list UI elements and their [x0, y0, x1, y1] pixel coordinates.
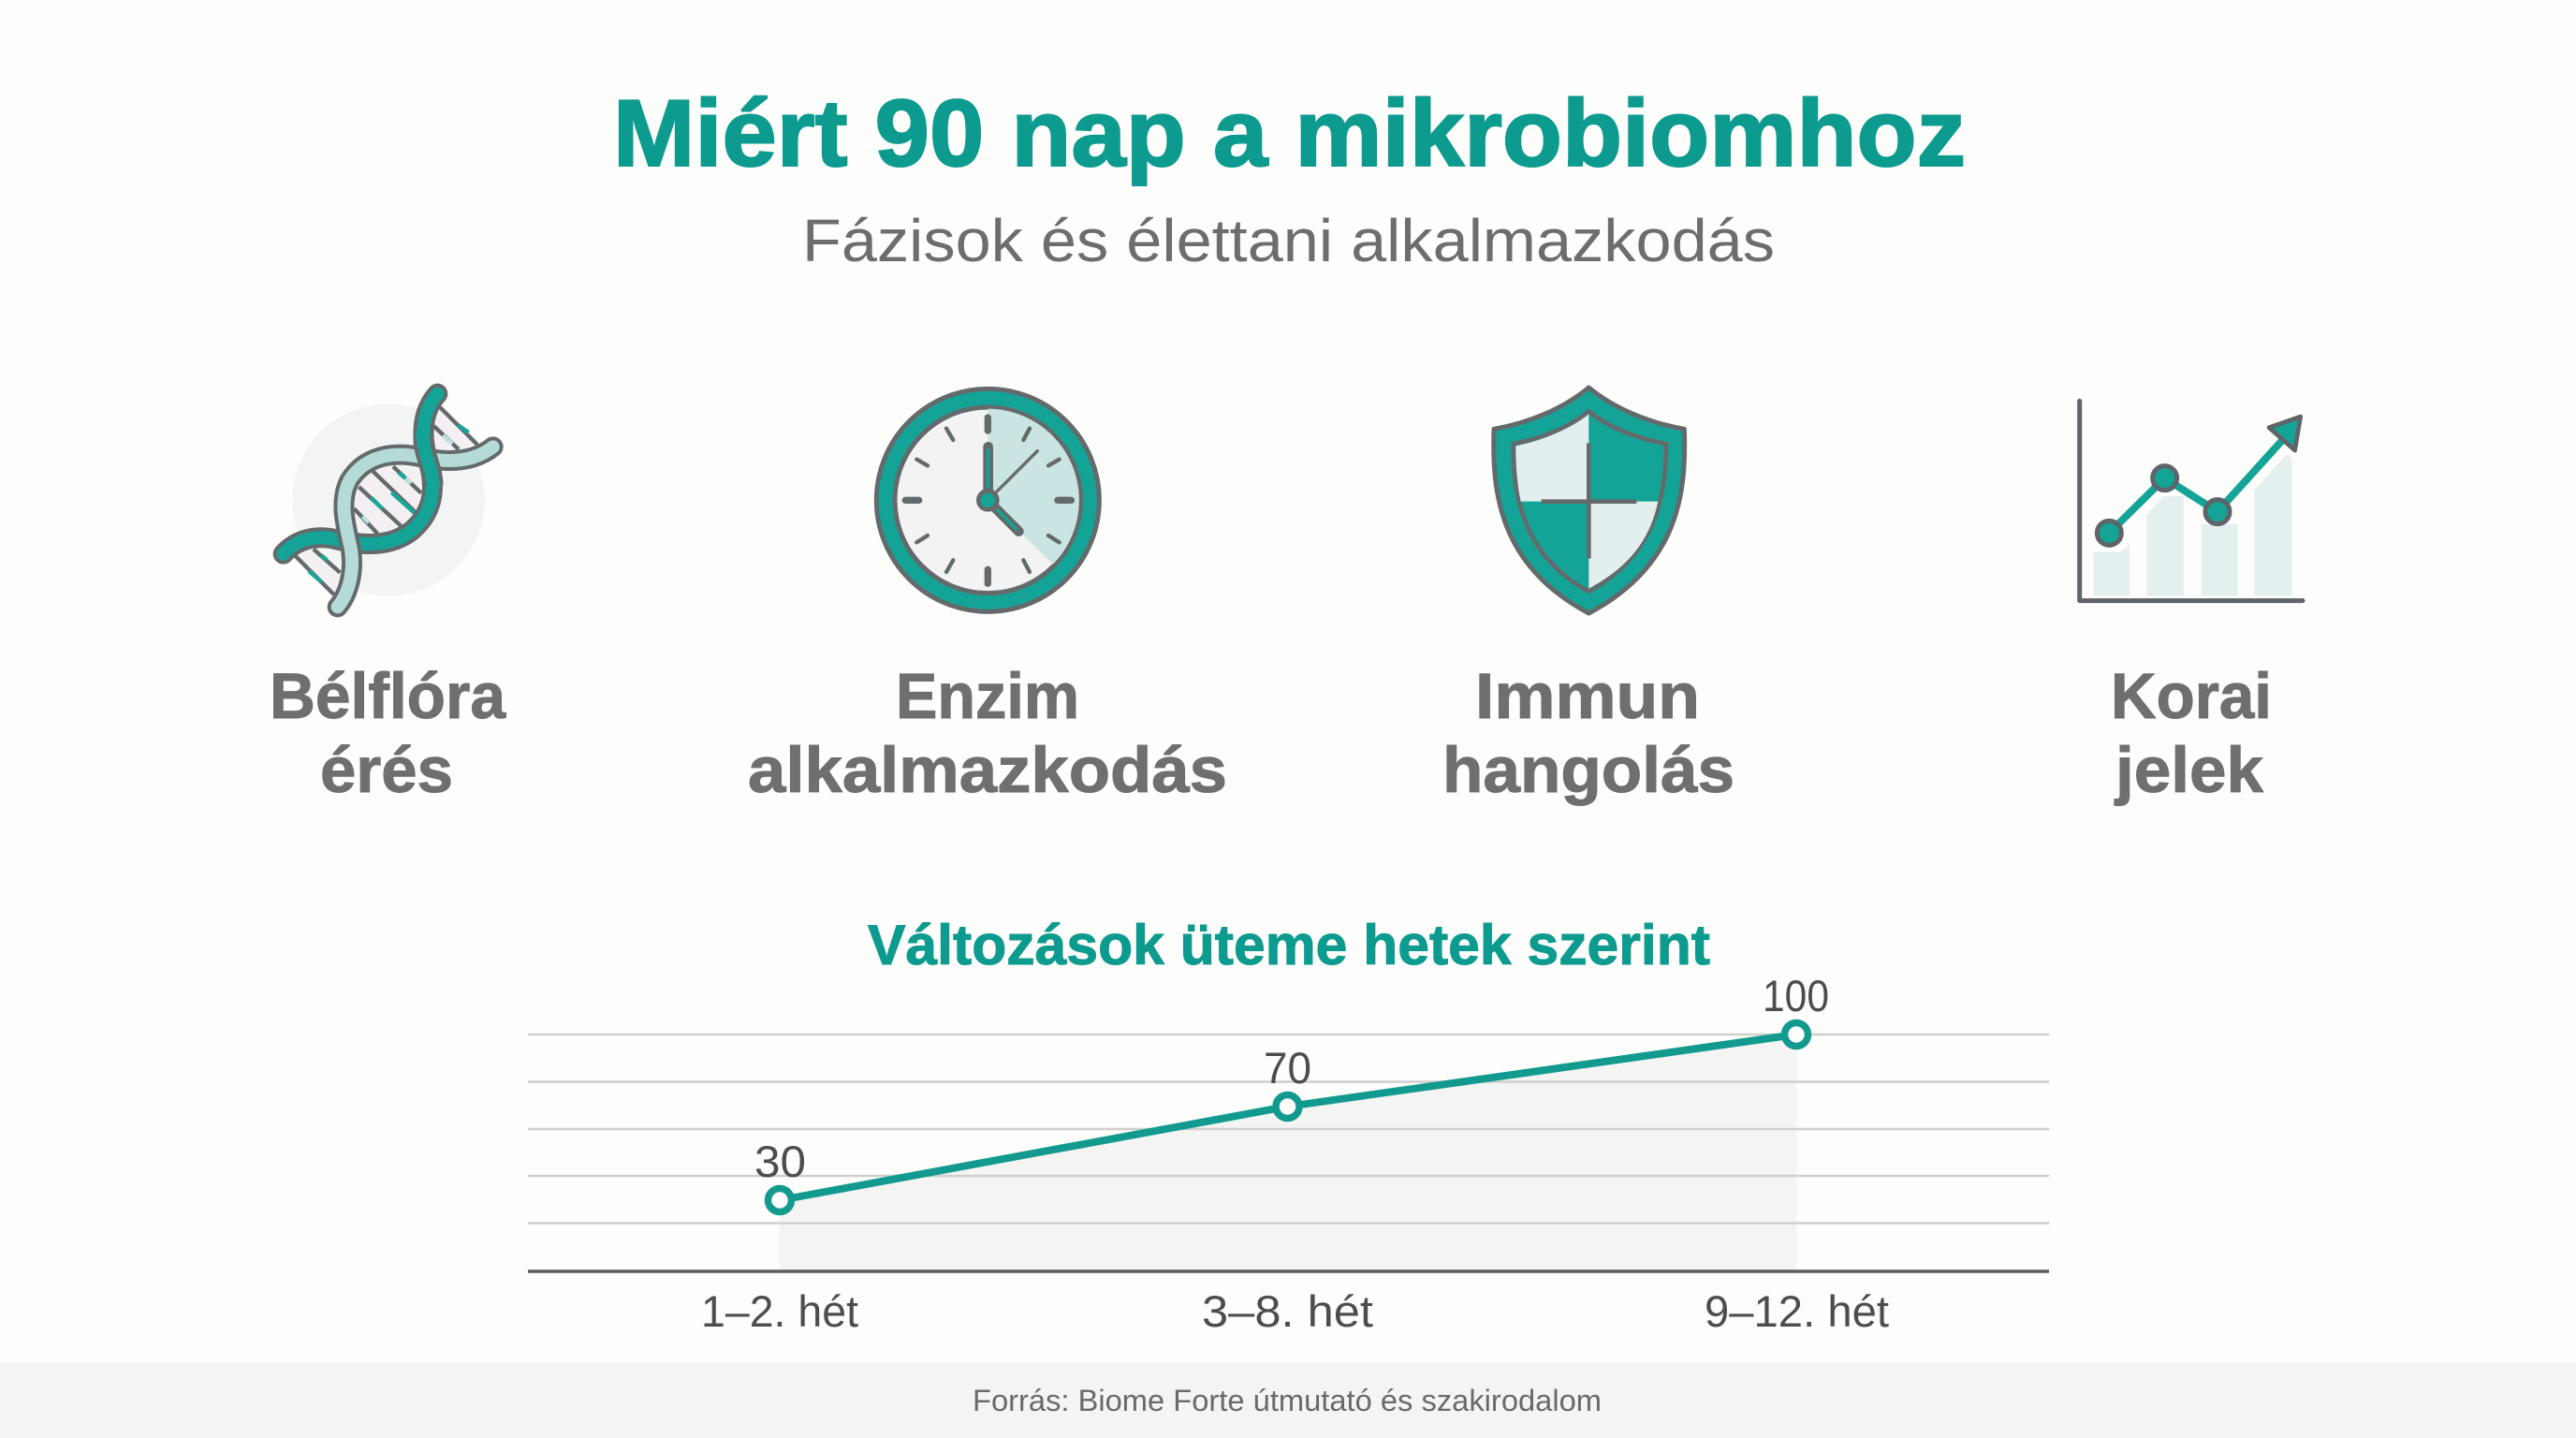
line chart: 100: [1763, 971, 1829, 1020]
label: Korai jelek: [2111, 660, 2272, 806]
icon: growth chart: [2080, 401, 2303, 601]
label: Korai jelek: jelek: [2114, 734, 2264, 806]
label: Korai jelek: Korai: [2111, 660, 2272, 732]
icon: shield: [1494, 388, 1685, 613]
label: Immun hangolás: [1442, 660, 1734, 806]
label: Bélflóra érés: Bélflóra: [270, 660, 506, 732]
line chart: 70: [1264, 1043, 1311, 1093]
label: Immun hangolás: hangolás: [1442, 734, 1734, 806]
line chart: 3–8. hét: [1202, 1286, 1373, 1336]
footer band: Forrás: Biome Forte útmutató és szakirodalom: [973, 1384, 1602, 1417]
label: Enzim alkalmazkodás: [748, 660, 1227, 806]
subtitle: Fázisok és élettani alkalmazkodás: [802, 207, 1775, 274]
label: Bélflóra érés: érés: [320, 734, 453, 806]
icon: DNA helix: [284, 394, 493, 607]
line chart: 9–12. hét: [1705, 1286, 1889, 1336]
chart title: Változások üteme hetek szerint: [868, 914, 1710, 976]
label: Bélflóra érés: [270, 660, 506, 806]
line chart: [528, 971, 2049, 1336]
label: Enzim alkalmazkodás: alkalmazkodás: [748, 734, 1227, 806]
line chart: 1–2. hét: [701, 1286, 858, 1336]
title: Miért 90 nap a mikrobiomhoz: [613, 81, 1966, 186]
label: Immun hangolás: Immun: [1475, 660, 1700, 732]
footer band: [0, 1363, 2576, 1438]
line chart: 30: [754, 1137, 806, 1186]
label: Enzim alkalmazkodás: Enzim: [896, 660, 1079, 732]
icon: clock: [876, 389, 1099, 611]
